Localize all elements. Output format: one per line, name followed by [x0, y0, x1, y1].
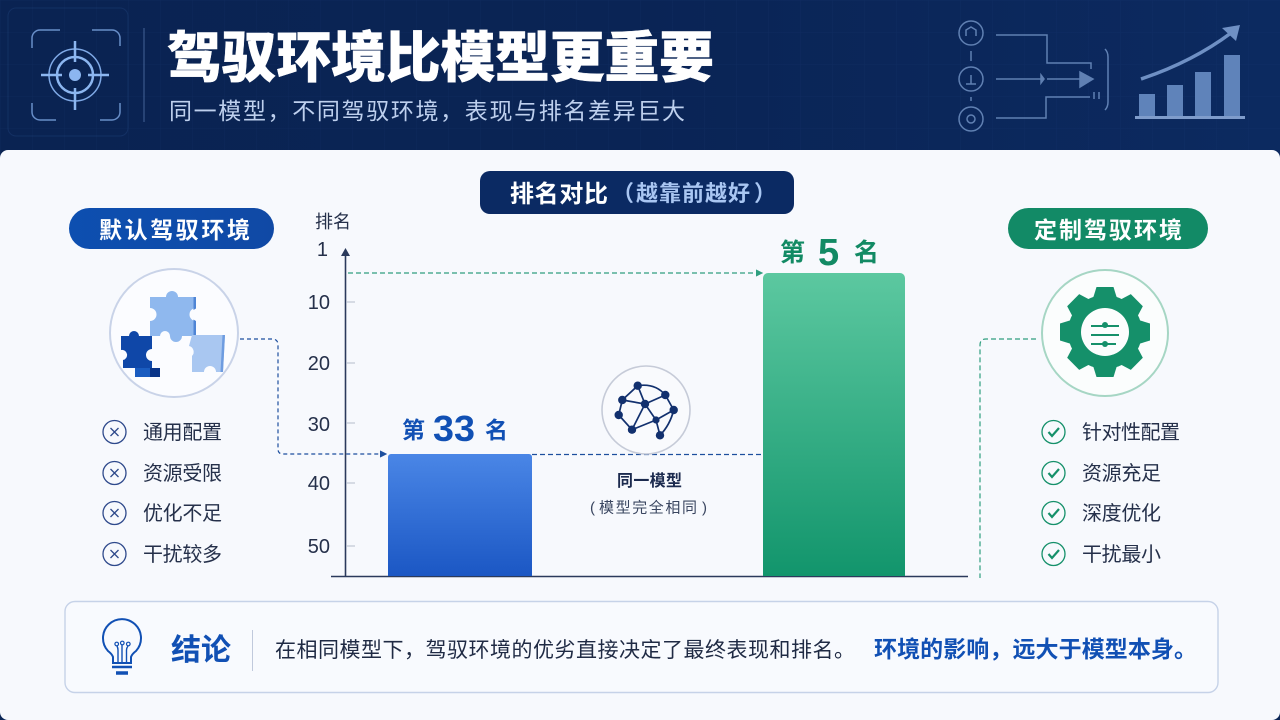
list: custom benefits: 针对性配置 [1082, 421, 1180, 444]
heading: default environment [69, 208, 274, 249]
value label: rank 33: 第 [402, 417, 425, 443]
y axis numbers [308, 239, 330, 558]
connector: custom to axis [980, 339, 1036, 578]
subtitle: 同一模型，不同驾驭环境，表现与排名差异巨大 [169, 98, 685, 124]
list: default drawbacks: 通用配置 [143, 421, 222, 444]
heading: custom environment [1008, 208, 1208, 249]
conclusion label: 结论 [171, 634, 231, 667]
y axis [331, 248, 968, 576]
chart: ranking comparison [308, 212, 968, 576]
label: same model: ) [702, 500, 707, 516]
bar: default rank 33 [388, 454, 532, 576]
panel: conclusion [65, 602, 1218, 692]
y axis numbers: 50 [308, 536, 330, 558]
y axis numbers: 20 [308, 353, 330, 375]
label: same model: ( [590, 500, 595, 516]
value label: rank 5: 5 [818, 232, 839, 274]
list: default drawbacks [103, 420, 222, 566]
conclusion text: 在相同模型下，驾驭环境的优劣直接决定了最终表现和排名。 [275, 639, 855, 662]
list: custom benefits [1042, 420, 1180, 566]
icon: gear [1042, 270, 1168, 396]
chart heading: （ [612, 181, 634, 206]
header band [0, 0, 1280, 160]
title: 驾驭环境比模型更重要 [167, 13, 714, 93]
label: same model: 模型完全相同 [599, 498, 697, 516]
icon: growth chart [1135, 25, 1245, 119]
icon: process flow [959, 21, 1108, 131]
value label: rank 5: 名 [854, 239, 879, 267]
list: custom benefits: 资源充足 [1082, 462, 1161, 485]
y axis numbers: 1 [317, 239, 328, 261]
axis label: 排名 [315, 212, 351, 232]
list: default drawbacks: 优化不足 [143, 502, 222, 525]
panel: custom environment [1008, 208, 1208, 566]
value label: rank 5 [780, 232, 879, 274]
icon: shared model network [602, 366, 690, 454]
connector: default to bar [240, 339, 386, 454]
conclusion emphasis: 环境的影响，远大于模型本身。 [874, 636, 1197, 662]
main panel [0, 150, 1280, 720]
reference line: rank 33 [532, 454, 763, 456]
y axis numbers: 10 [308, 292, 330, 314]
chart heading: 越靠前越好 [636, 181, 750, 206]
label: same model: 同一模型 [617, 472, 682, 490]
chart heading [480, 171, 794, 214]
y axis numbers: 30 [308, 414, 330, 436]
heading: custom environment: 定制驾驭环境 [1034, 217, 1182, 243]
list: custom benefits: 深度优化 [1082, 502, 1161, 525]
label: same model [590, 472, 707, 516]
list: custom benefits: 干扰最小 [1082, 543, 1161, 566]
panel: default environment [69, 208, 274, 566]
y axis numbers: 40 [308, 473, 330, 495]
icon: light bulb [103, 619, 141, 673]
chart heading: ） [754, 181, 776, 206]
value label: rank 33: 名 [485, 417, 508, 443]
chart heading: 排名对比 [510, 181, 608, 208]
reference line: rank 5 [348, 272, 762, 274]
value label: rank 5: 第 [780, 239, 805, 267]
value label: rank 33: 33 [433, 408, 475, 449]
bar: custom rank 5 [763, 273, 905, 576]
list: default drawbacks: 干扰较多 [143, 543, 222, 566]
icon: puzzle pieces [110, 269, 238, 397]
heading: default environment: 默认驾驭环境 [99, 217, 250, 243]
header divider [144, 28, 145, 122]
value label: rank 33 [402, 408, 508, 449]
icon: target [32, 30, 120, 120]
list: default drawbacks: 资源受限 [143, 462, 222, 485]
